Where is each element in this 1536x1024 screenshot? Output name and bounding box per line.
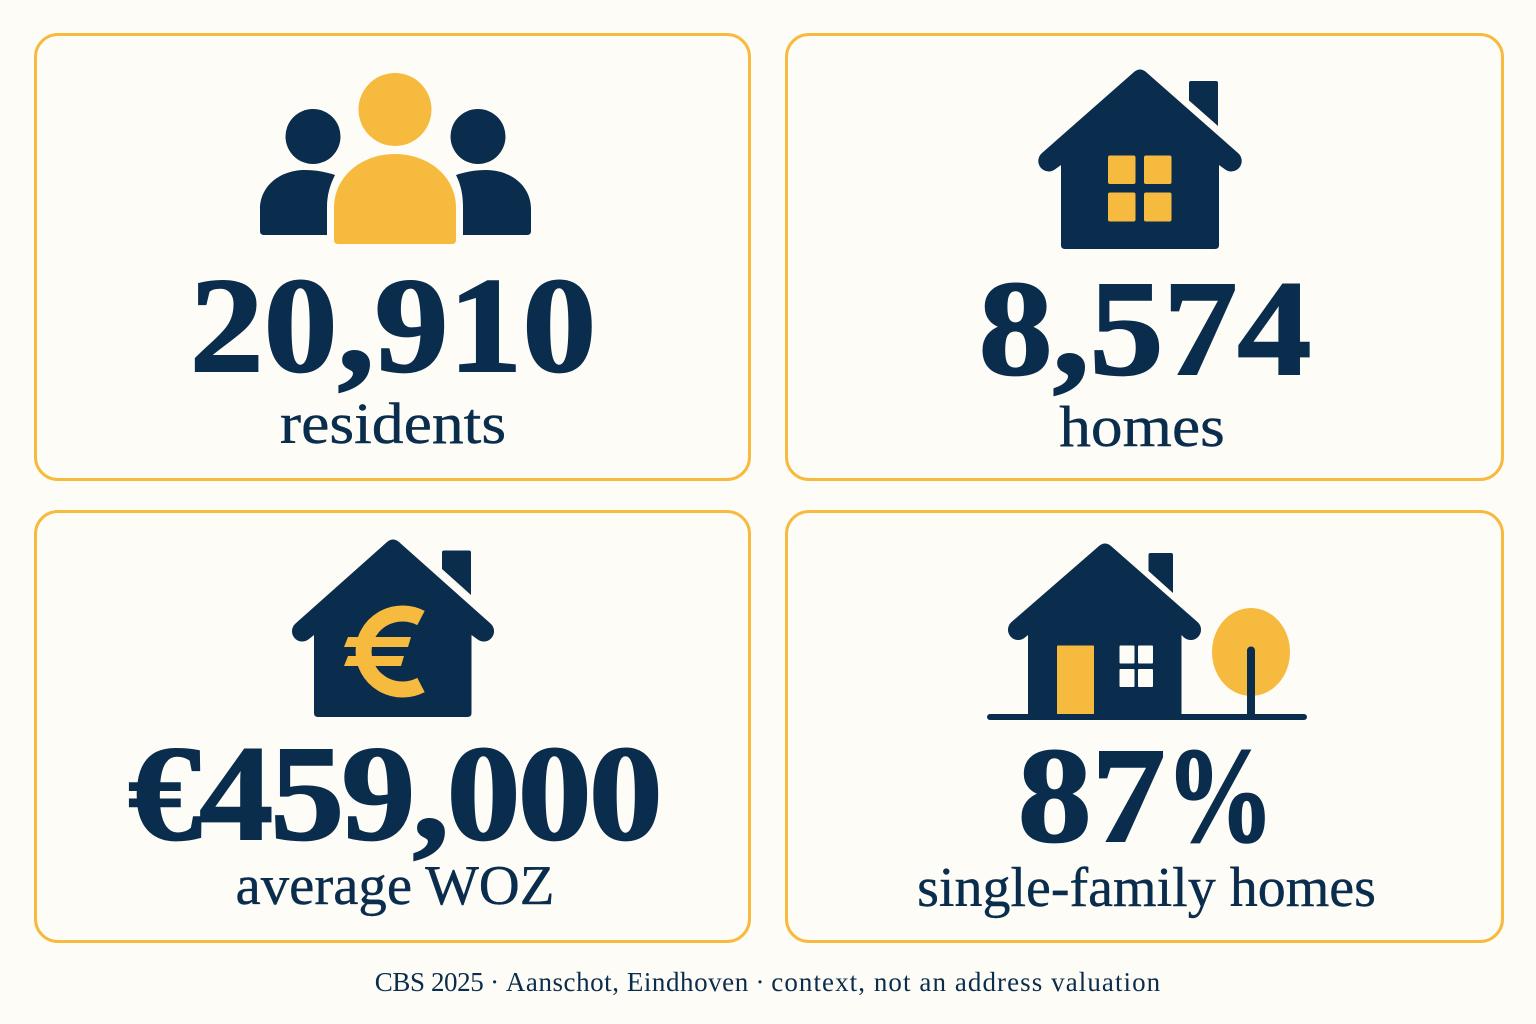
number: residents: 20,910: [190, 251, 596, 401]
number: homes: 8,574: [978, 254, 1311, 404]
icon: house with euro sign: [292, 540, 494, 717]
number: single-family share: 87: [1018, 721, 1166, 871]
label: homes: homes: [1059, 394, 1225, 459]
icon: house with window: [1038, 70, 1242, 249]
label: residents: residents: [280, 391, 506, 456]
label: average WOZ: average WOZ: [236, 855, 554, 917]
icon: house with door and tree: [987, 544, 1307, 720]
panel: homes: [785, 33, 1504, 481]
panel: average WOZ: [34, 510, 751, 943]
number: average WOZ: €459,000: [128, 718, 659, 868]
number: single-family share: [1018, 721, 1274, 871]
number: single-family share: %: [1166, 721, 1274, 871]
panel: residents: [34, 33, 751, 481]
panel: single-family homes: [785, 510, 1504, 943]
footer source note: CBS 2025 · Aanschot, Eindhoven · context, not an address valuation: [375, 967, 1161, 997]
icon: group of three people: [260, 73, 531, 244]
label: single-family homes: single-family homes: [917, 857, 1376, 919]
